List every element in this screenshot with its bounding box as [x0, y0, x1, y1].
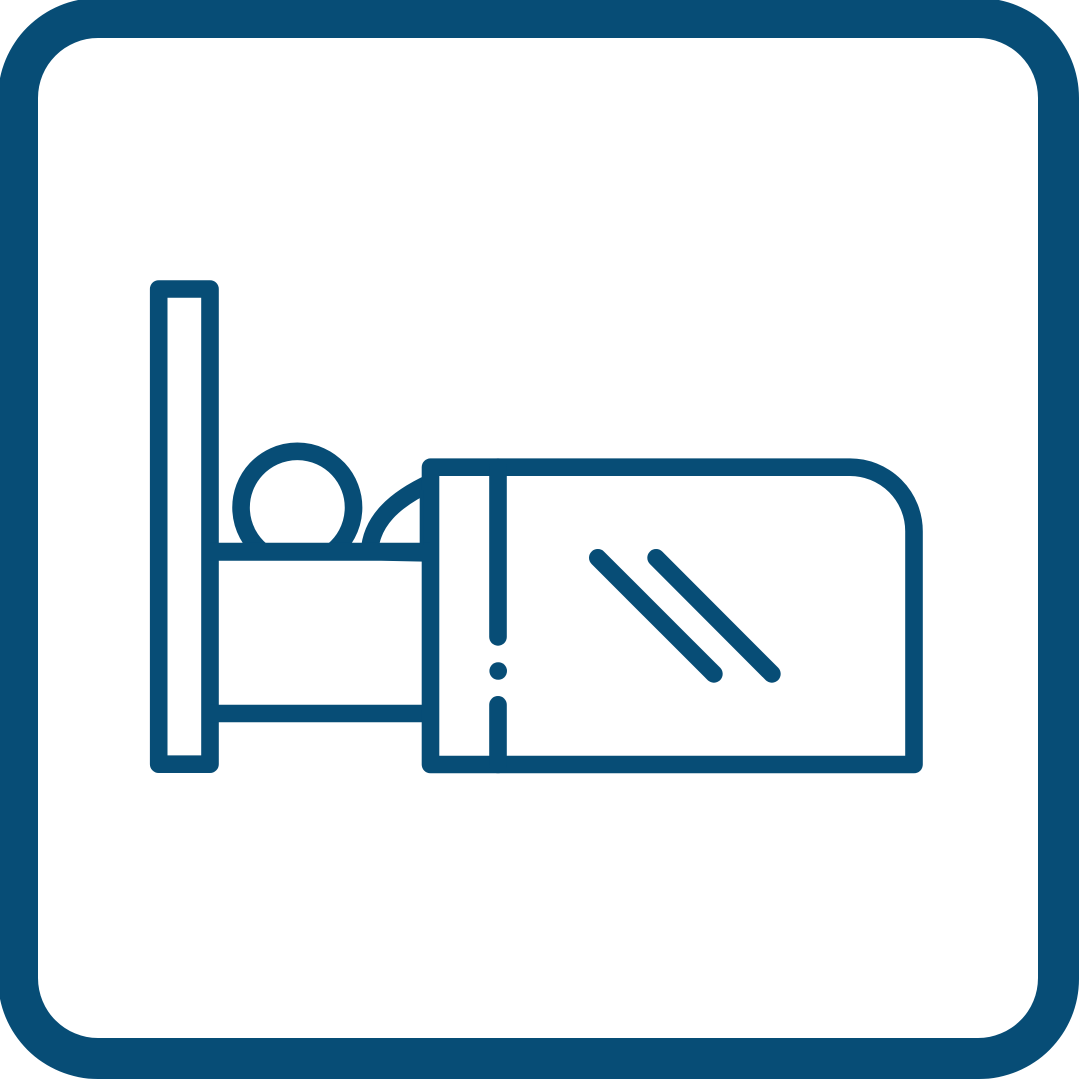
- blanket crease right: [656, 558, 772, 674]
- bed frame rail: [210, 705, 430, 722]
- head on pillow: [241, 451, 354, 551]
- blanket fold dot: [489, 662, 507, 680]
- blanket: [430, 467, 914, 764]
- pillow: [370, 482, 431, 552]
- pillow edge sliver: [420, 490, 424, 545]
- headboard: [159, 289, 210, 764]
- blanket fold lower: [489, 705, 507, 764]
- blanket fold upper: [489, 467, 507, 637]
- blanket crease left: [598, 558, 714, 674]
- icon: bed: [159, 289, 914, 764]
- mattress top line: [210, 543, 430, 562]
